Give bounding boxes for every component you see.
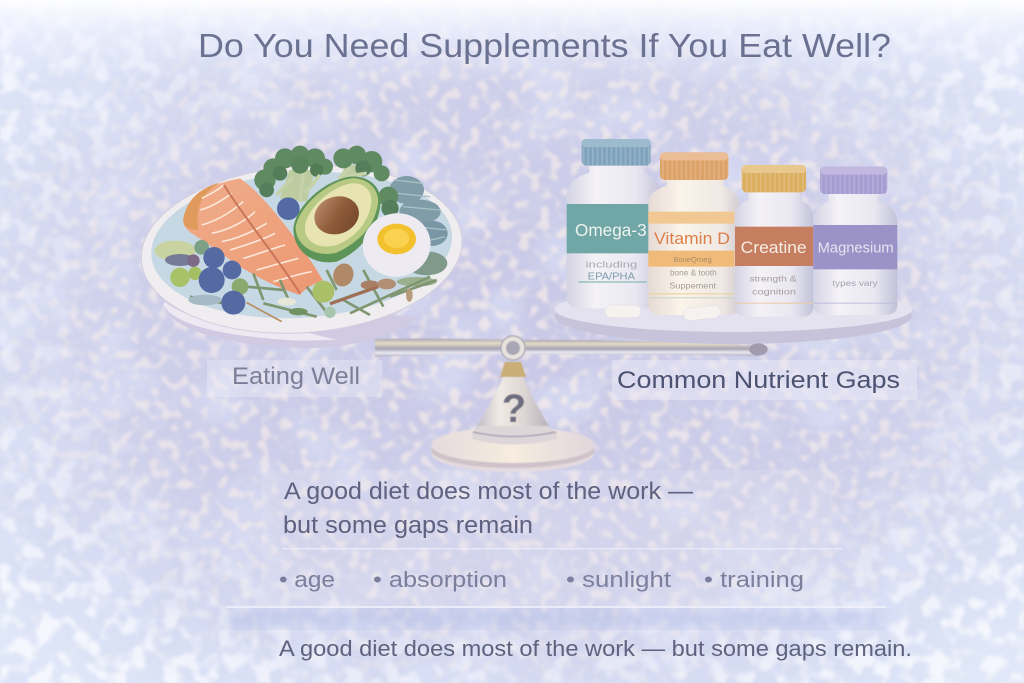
bottle: Vitamin D: bone & tooth [670,268,717,278]
left greens [154,240,248,305]
salmon [183,178,323,295]
bottle: Vitamin D: Vitamin D [654,229,730,248]
bottle: Omega-3: EPA/PHA [588,271,635,282]
bottle: Creatine: cognition [752,287,796,297]
pills [605,305,721,321]
bottle: Vitamin D [648,152,740,315]
factor: age: • age [279,567,335,592]
closing statement: A good diet does most of the work — but some gaps remain. [279,636,912,661]
bottle: Magnesium [813,167,897,315]
factor: absorption: • absorption [373,567,507,592]
supplement tray with bottles [554,139,912,355]
summary line 2: but some gaps remain [283,512,533,539]
blueberry behind [277,197,300,220]
tray [554,287,912,355]
panel: summary text [226,470,886,628]
under plate [163,297,417,348]
bottle: Omega-3: including [586,259,637,269]
blueberries [199,247,245,315]
summary line 1: A good diet does most of the work — [284,478,693,505]
base [431,427,595,472]
beam [375,339,762,357]
egg [358,208,436,282]
question mark: ? [502,387,526,431]
plate well [146,162,457,328]
pivot [501,336,525,360]
bottle: Magnesium: Magnesium [818,241,894,257]
factor: training: • training [704,567,804,592]
bottle: Vitamin D: Suppement [669,280,717,290]
avocado [293,177,381,262]
bottle: Creatine: Creatine [741,238,807,257]
label: Common Nutrient Gaps [612,360,917,400]
bottle: Creatine [735,165,813,317]
bottle: Creatine: strength & [749,274,797,284]
balance scale: beam and stand [375,336,762,472]
label: Common Nutrient Gaps: Common Nutrient Gaps [617,367,900,394]
bottom greens and nuts [190,261,437,322]
label: Eating Well [207,360,382,397]
factor: sunlight: • sunlight [566,567,671,592]
plate rim [136,155,468,344]
bottle: Omega-3: Omega-3 [575,220,647,240]
plate of food [136,146,468,348]
herbs right [389,176,448,286]
factor list [279,567,804,592]
label: Eating Well: Eating Well [232,363,360,390]
title: Do You Need Supplements If You Eat Well? [198,27,891,64]
bottle: Magnesium: types vary [832,278,878,288]
bottle: Vitamin D: BoneQmeg [673,255,712,264]
cone [472,362,557,444]
broccoli [254,146,399,217]
pit [309,191,364,240]
bottle: Omega-3 [567,139,663,308]
